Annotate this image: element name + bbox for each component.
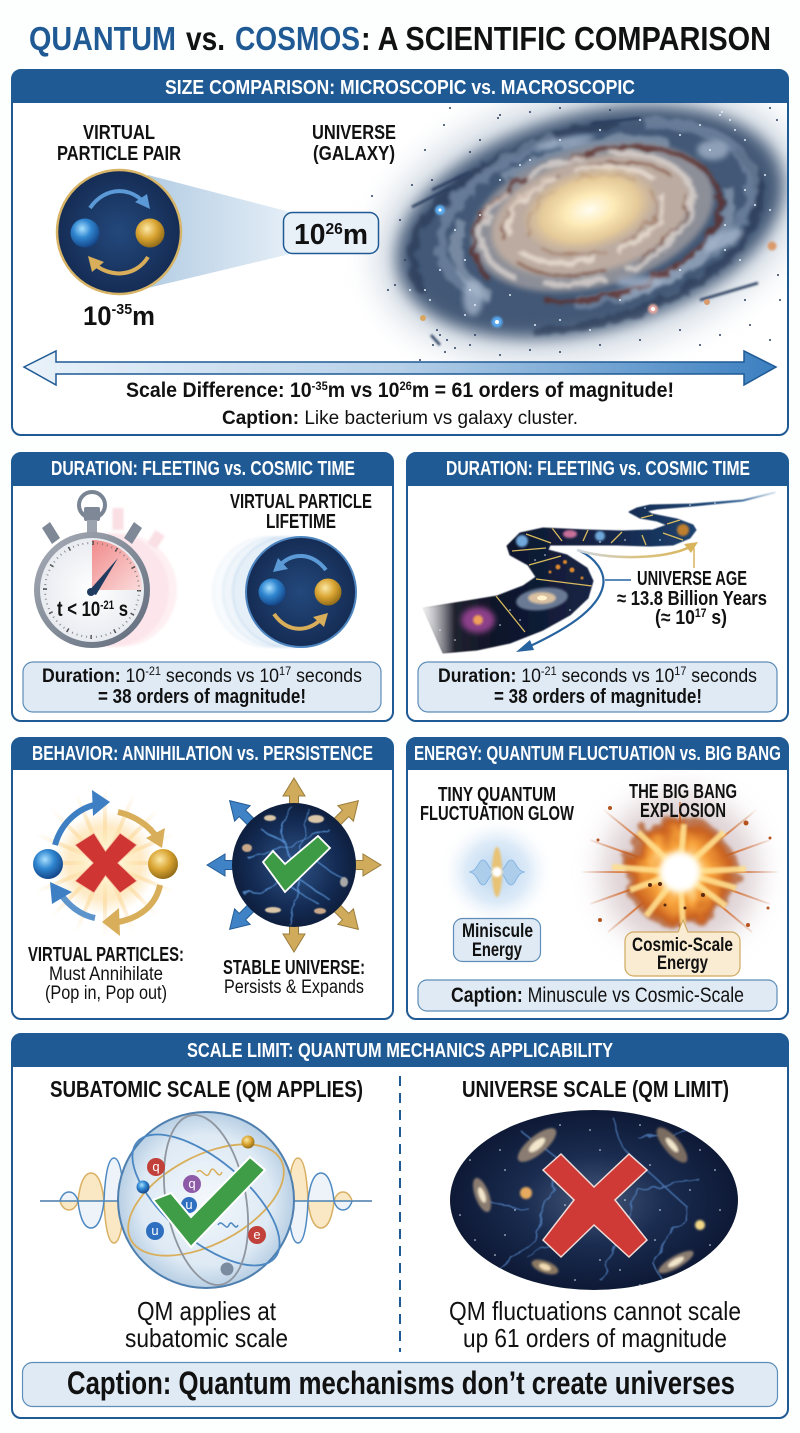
- caption box: Caption: Minuscule vs Cosmic-Scale: [451, 984, 744, 1007]
- label: virtual particle lifetime: LIFETIME: [266, 511, 336, 533]
- callout: duration: seconds: [291, 665, 362, 687]
- connector line: [605, 579, 631, 581]
- text: QM applies: [125, 1296, 288, 1353]
- panel: scale limit: [12, 1034, 788, 1418]
- panel: energy: [407, 738, 788, 1019]
- text: QM fluctuations: up 61 orders of magnitude: [463, 1323, 727, 1353]
- icon: atom with check: [40, 1108, 372, 1292]
- quark labels: u: [185, 1197, 193, 1212]
- title: vs.: [186, 20, 225, 57]
- quark labels: u: [151, 1223, 159, 1238]
- label: virtual particle pair: VIRTUAL: [83, 122, 155, 144]
- icon: virtual particle pair circle: [57, 170, 181, 294]
- callout: miniscule energy: Energy: [472, 940, 522, 961]
- header bar: [12, 1034, 788, 1067]
- icon: cosmos with X: [450, 1110, 738, 1290]
- label: big bang: EXPLOSION: [640, 800, 726, 822]
- callout: cosmic-scale energy: [625, 920, 740, 976]
- header text: SCALE LIMIT: QUANTUM MECHANICS APPLICABILITY: [187, 1040, 614, 1062]
- panel: size comparison: [12, 34, 800, 435]
- callout: duration: 17: [279, 664, 291, 678]
- heading: subatomic: SUBATOMIC SCALE (QM APPLIES): [50, 1076, 363, 1102]
- label: universe age: UNIVERSE AGE: [637, 568, 747, 590]
- callout: cosmic-scale energy: Energy: [657, 953, 708, 974]
- label: universe galaxy: [312, 122, 396, 165]
- header text: BEHAVIOR: ANNIHILATION vs. PERSISTENCE: [32, 743, 373, 765]
- value: 10^-35 m: -35: [112, 301, 132, 318]
- galaxy image: [363, 103, 787, 362]
- label: big bang: THE BIG BANG: [629, 781, 737, 803]
- quark labels: q: [188, 1176, 196, 1191]
- callout: duration: seconds vs 10: [557, 665, 674, 687]
- quark labels: [146, 1158, 266, 1244]
- divider: [399, 1076, 401, 1352]
- panel: duration right: [407, 453, 788, 721]
- value: 10^26 m box: 26: [325, 221, 343, 238]
- text: virtual particles: Must Annihilate: [49, 964, 163, 985]
- icon: stopwatch: -21: [100, 598, 114, 612]
- header text: DURATION: FLEETING vs. COSMIC TIME: [51, 458, 355, 480]
- label: virtual particle lifetime: VIRTUAL PARTICLE: [230, 491, 372, 513]
- scale difference text: Scale Difference: 10: [126, 379, 326, 402]
- panel: behavior: [12, 738, 393, 1019]
- header bar: [12, 738, 393, 770]
- text: QM fluctuations: QM fluctuations cannot scale: [449, 1296, 741, 1326]
- icon: annihilation: [30, 788, 180, 938]
- scale arrow: [24, 351, 776, 385]
- wave: right side: [288, 1158, 372, 1243]
- label: universe age: 17: [695, 606, 707, 620]
- cosmic timeline road: [423, 492, 775, 653]
- callout: duration: Duration: 10: [42, 665, 148, 687]
- value: 10^26 m box: m: [343, 219, 368, 251]
- callout: duration: 17: [674, 664, 687, 678]
- title: COSMOS: [235, 20, 360, 57]
- header text: SIZE COMPARISON: MICROSCOPIC vs. MACROSCOPIC: [165, 77, 635, 99]
- text: virtual particles: [28, 944, 184, 1004]
- icon: expanding universe: [207, 778, 381, 952]
- label: universe age: ≈ 13.8 Billion Years: [617, 588, 767, 610]
- label: tiny quantum fluctuation: [420, 784, 574, 825]
- text: stable universe: [223, 957, 365, 998]
- title: QUANTUM: [29, 20, 176, 57]
- text: virtual particles: VIRTUAL PARTICLES:: [28, 944, 184, 966]
- icon: big bang explosion: [580, 794, 780, 950]
- text: stable universe: Persists & Expands: [224, 977, 364, 998]
- caption box: [418, 980, 777, 1011]
- text: virtual particles: (Pop in, Pop out): [45, 983, 167, 1004]
- value: 10^-35 m: m: [132, 301, 155, 331]
- text: QM applies: QM applies at: [137, 1296, 277, 1326]
- value: 10^26 m box: 10: [294, 219, 326, 251]
- label: big bang: [629, 781, 737, 822]
- callout: duration: = 38 orders of magnitude!: [98, 686, 306, 708]
- callout: miniscule energy: Miniscule: [462, 921, 533, 942]
- label: universe galaxy: (GALAXY): [313, 143, 395, 165]
- scale difference text: 26: [399, 379, 412, 393]
- label: virtual particle lifetime: [230, 491, 372, 533]
- icon: stopwatch: t < 10: [57, 598, 111, 621]
- callout: duration: [418, 662, 777, 712]
- text: QM applies: subatomic scale: [125, 1323, 288, 1353]
- wave: left side: [40, 1158, 124, 1243]
- callout: duration: seconds vs 10: [161, 665, 279, 687]
- icon: stopwatch: [34, 492, 177, 648]
- callout: duration: = 38 orders of magnitude!: [494, 686, 702, 708]
- callout: duration: -21: [541, 664, 557, 678]
- zoom cone: [148, 175, 290, 288]
- icon: stopwatch: s: [114, 598, 128, 621]
- value: 10^-35 m: 10: [83, 301, 113, 331]
- callout: cosmic-scale energy: Cosmic-Scale: [632, 935, 733, 956]
- galaxy stars: [372, 108, 780, 360]
- label: universe galaxy: UNIVERSE: [312, 122, 396, 144]
- text: stable universe: STABLE UNIVERSE:: [223, 957, 365, 979]
- icon: particle pair with motion blur: [213, 537, 356, 647]
- callout: miniscule energy: [454, 918, 540, 962]
- callout: duration: seconds: [686, 665, 757, 687]
- value: 10^26 m box: [284, 212, 378, 254]
- label: universe age: (≈ 10: [655, 607, 700, 629]
- quark labels: q: [152, 1159, 160, 1174]
- blue timeline arrow: [516, 551, 603, 652]
- scale difference text: m = 61 orders of magnitude!: [412, 379, 674, 402]
- label: virtual particle pair: PARTICLE PAIR: [57, 143, 181, 165]
- panel: duration left: [12, 453, 393, 721]
- callout: duration: [23, 662, 381, 712]
- quark labels: e: [253, 1227, 261, 1242]
- gold timeline arrow: [577, 542, 698, 568]
- header bar: [407, 453, 788, 486]
- header bar: [12, 453, 393, 486]
- label: tiny quantum fluctuation: TINY QUANTUM: [438, 784, 556, 806]
- scale difference text: m vs 10: [328, 379, 399, 402]
- label: universe age: [617, 568, 767, 629]
- callout: duration: -21: [145, 664, 161, 678]
- text: QM fluctuations: [449, 1296, 741, 1353]
- callout: duration: Duration: 10: [438, 665, 544, 687]
- title: [29, 20, 771, 57]
- icon: quantum glow: [436, 816, 558, 928]
- caption: Caption: Like bacterium vs galaxy cluster.: [222, 408, 578, 429]
- scale difference text: -35: [312, 379, 328, 393]
- label: universe age: s): [707, 607, 727, 629]
- label: virtual particle pair: [57, 122, 181, 165]
- header bar: [12, 70, 788, 103]
- header bar: [407, 738, 788, 770]
- label: tiny quantum fluctuation: FLUCTUATION GLOW: [420, 803, 574, 825]
- heading: universe: UNIVERSE SCALE (QM LIMIT): [462, 1076, 729, 1102]
